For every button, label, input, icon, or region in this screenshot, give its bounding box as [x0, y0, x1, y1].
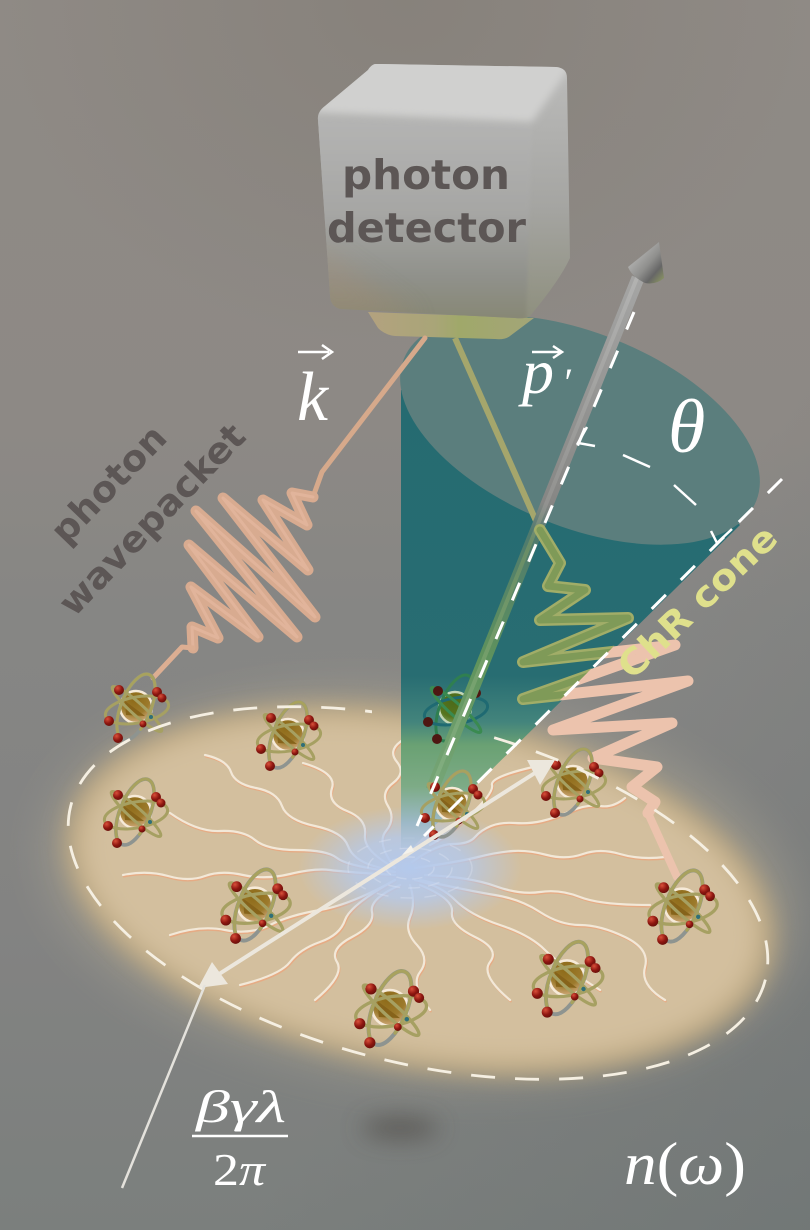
label: beta gamma lambda over 2 pi: βγλ [195, 1081, 286, 1132]
panel: refractive medium disk [21, 645, 810, 1125]
label: photon wavepacket: wavepacket [51, 416, 254, 624]
cone dashed edges and momentum dashed line [417, 312, 782, 836]
label: beta gamma lambda over 2 pi: 2π [213, 1144, 267, 1195]
rod arrow tip [628, 242, 664, 283]
angle ticks [578, 427, 732, 543]
label: k vector: k [297, 359, 330, 436]
angle theta arc [623, 455, 696, 505]
blue glow at impact point [298, 806, 522, 930]
detector label: photon [342, 151, 510, 199]
radius leader line [122, 985, 205, 1188]
emitted polarization waves [123, 722, 666, 1012]
atom: lower right [531, 936, 605, 1020]
label: p prime vector [518, 336, 572, 407]
label: theta: θ [668, 385, 705, 469]
atom: bottom centre [353, 965, 429, 1051]
atom: lower left [220, 864, 293, 946]
p arrow [532, 346, 562, 358]
atom: right emitter [647, 865, 720, 947]
atom: receiving wavepacket [540, 744, 608, 820]
ripples around impact point [348, 838, 472, 898]
detector neck [368, 312, 534, 339]
atom inside cone [422, 670, 490, 746]
label: refractive index: n(ω) [624, 1131, 746, 1197]
label: p prime vector: p [518, 336, 554, 407]
floor shadow [362, 1117, 438, 1139]
atom: top centre left [255, 697, 323, 773]
panel: Cherenkov cone top ellipse [367, 269, 793, 591]
green part of photon wavepacket inside the cone [517, 524, 634, 705]
atom: top left emitter [103, 669, 171, 745]
dashed boundary of radius circle [66, 705, 770, 1081]
detector label: detector [327, 204, 527, 252]
label: photon wavepacket: photon [43, 417, 175, 552]
atom: emitter at impact [419, 766, 487, 842]
label: p prime vector: ′ [562, 360, 572, 405]
arrowhead left [198, 962, 228, 988]
atom: middle left [102, 774, 170, 850]
rod: charged particle momentum [431, 242, 664, 790]
panel: Cherenkov cone body [401, 390, 740, 848]
photon detector [318, 64, 570, 340]
detector label [327, 151, 527, 252]
photon line to detector (olive) [455, 338, 540, 530]
photon wavepacket (right, pink outside the cone) [523, 530, 688, 877]
label: ChR cone: ChR cone [610, 517, 786, 688]
k arrow [298, 345, 332, 359]
photon wavepacket emitted towards detector (left) [153, 338, 425, 678]
arrowhead right [527, 760, 555, 785]
impact parameter arrow [122, 760, 555, 1188]
detector cube [318, 64, 570, 318]
arrowhead centre [402, 845, 414, 855]
label: beta gamma lambda over 2 pi [192, 1081, 288, 1195]
